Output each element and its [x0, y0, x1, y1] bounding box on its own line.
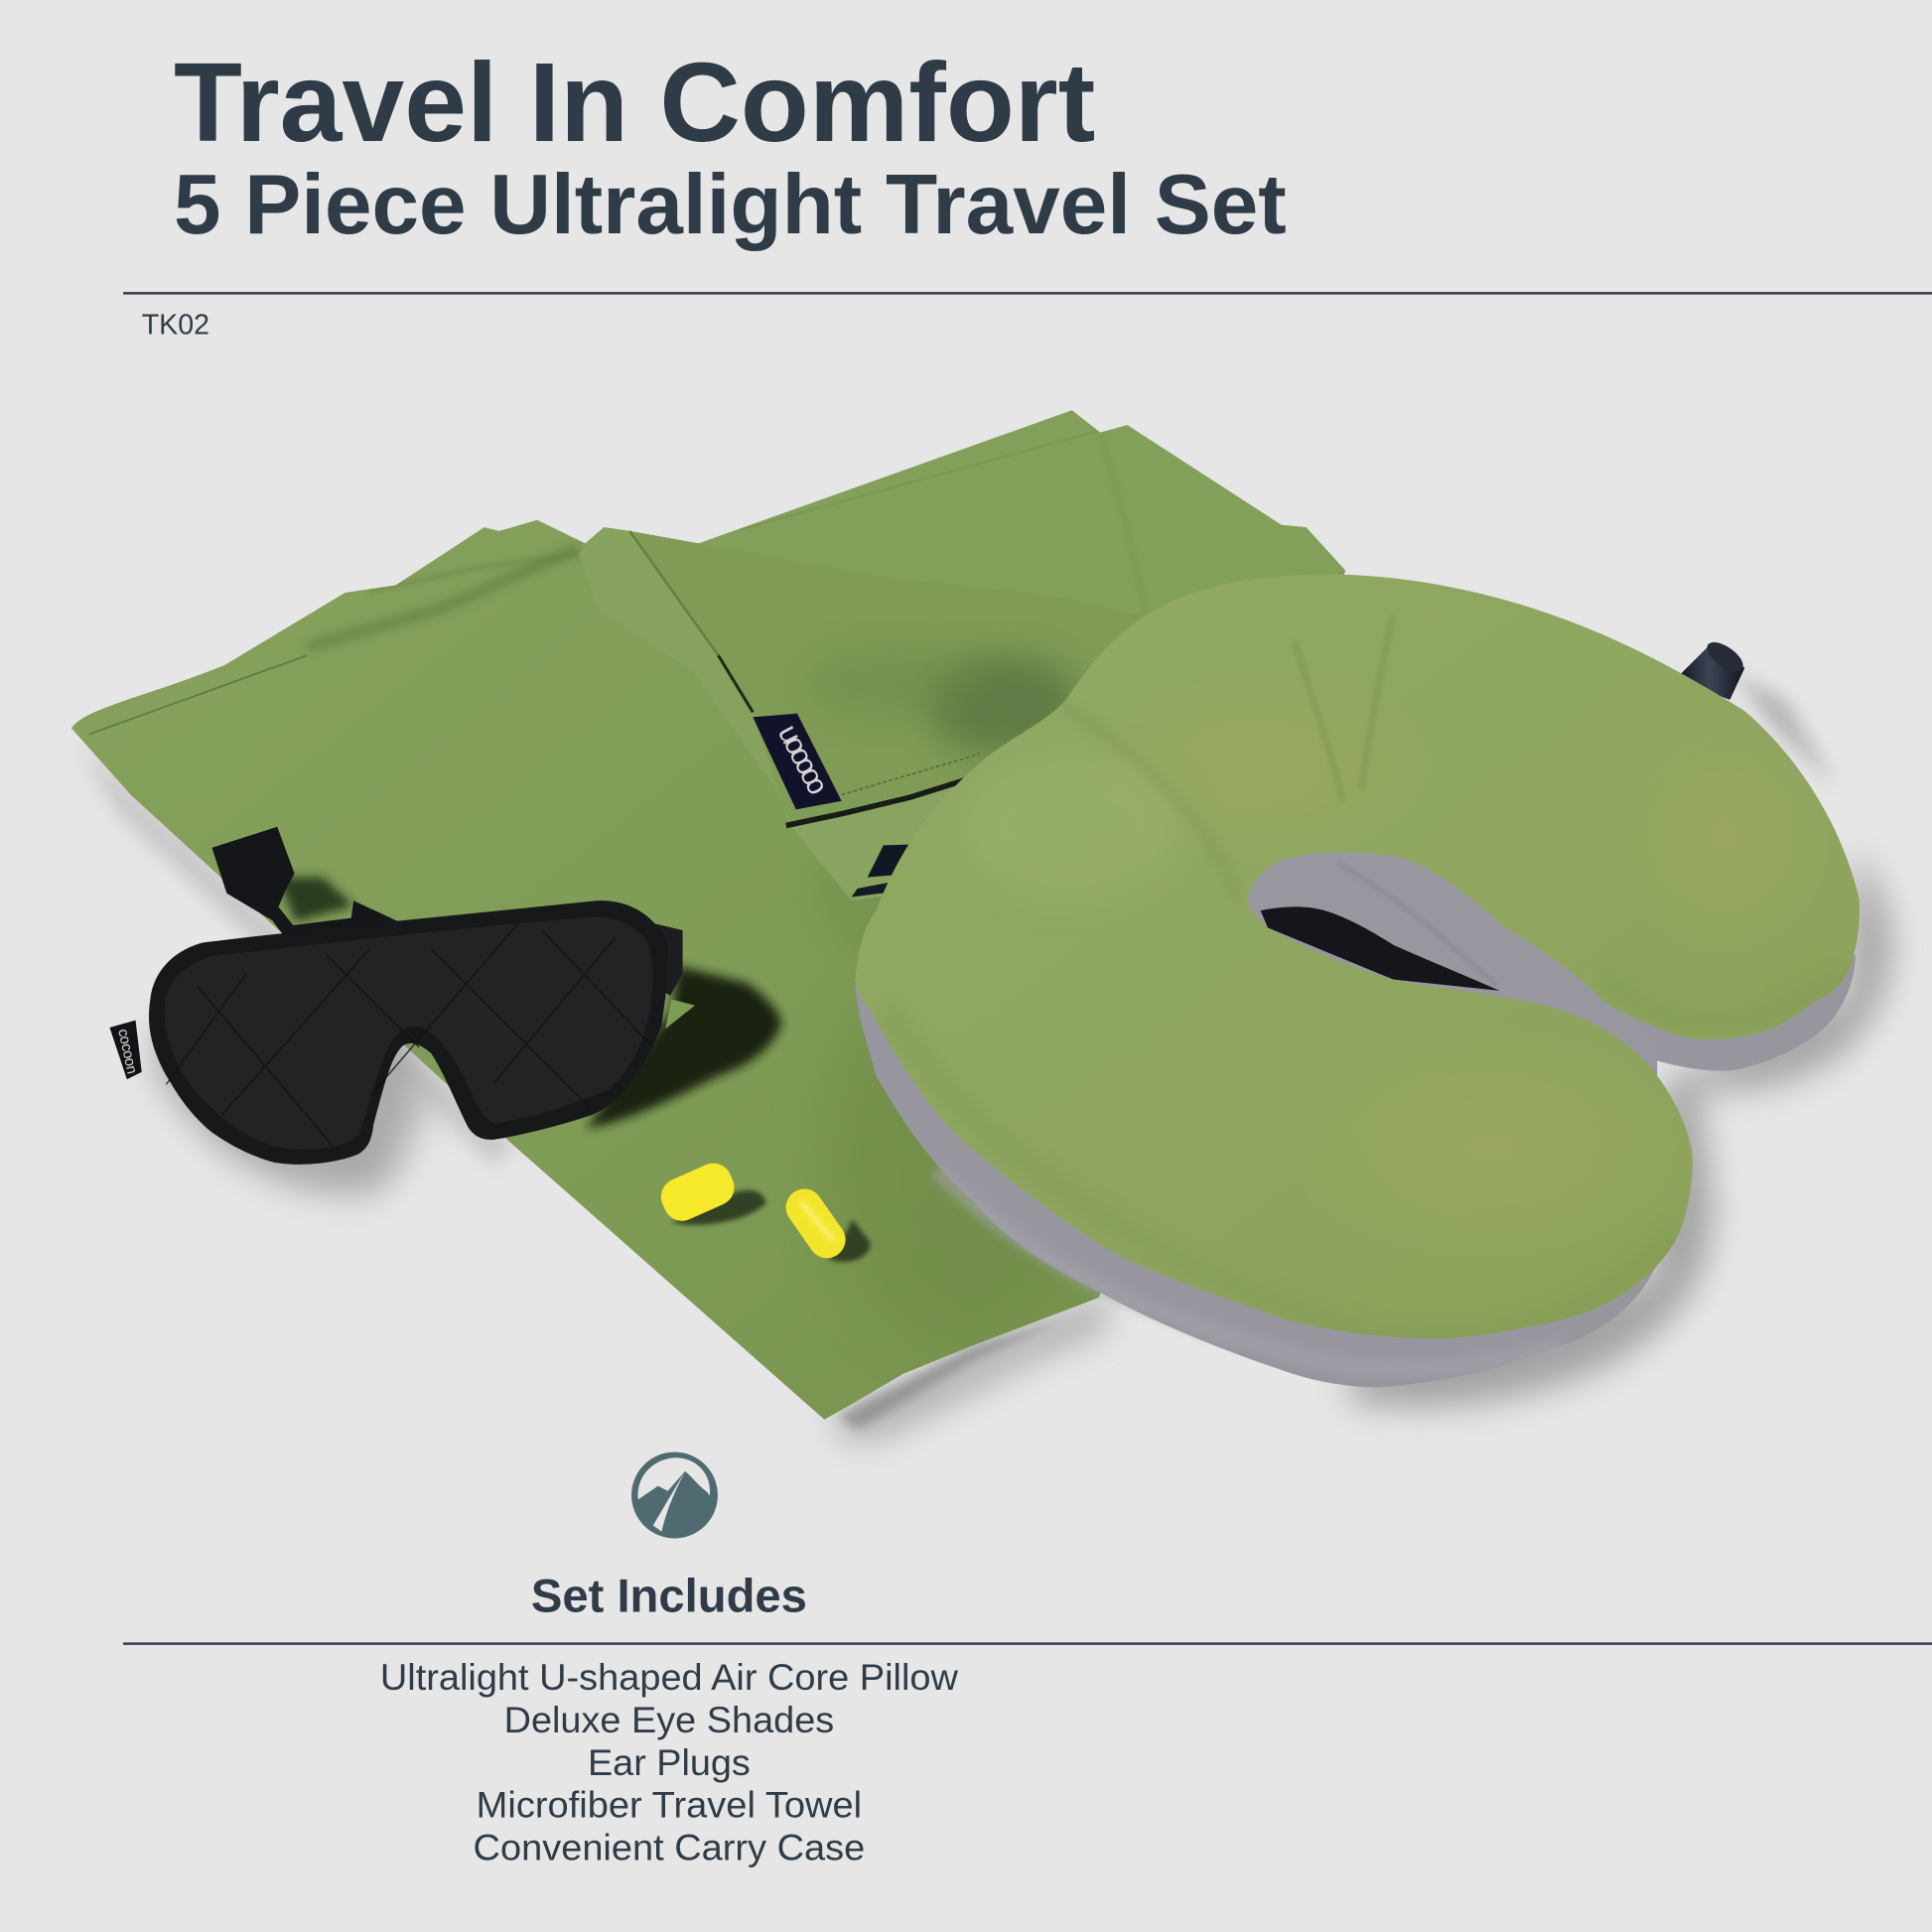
plug shadows	[671, 1190, 766, 1225]
plug right shadow	[828, 1220, 870, 1262]
list of included items: Ultralight U-shaped Air Core Pillow	[380, 1657, 959, 1698]
label text: cocoon	[768, 721, 832, 802]
towel label	[753, 714, 842, 809]
towel gap in strap shadow	[665, 1000, 695, 1029]
flap stitching	[842, 755, 980, 794]
list of included items: Microfiber Travel Towel	[477, 1785, 862, 1826]
back sheet	[699, 411, 1345, 570]
mask shadow on background	[154, 1023, 431, 1195]
green top surface	[855, 574, 1860, 1338]
plug right	[778, 1181, 853, 1266]
heading: set includes: Set Includes	[531, 1569, 807, 1621]
list of included items: Deluxe Eye Shades	[504, 1700, 834, 1740]
pillow shading	[1141, 620, 1749, 1177]
fold lower pocket	[852, 879, 910, 897]
travel towel	[71, 410, 1345, 1420]
air core pillow	[855, 574, 1860, 1387]
mask shadow on towel	[587, 966, 781, 1129]
fold dark pocket	[868, 844, 930, 878]
towel left edge shadow	[76, 740, 517, 1165]
eye shades	[109, 827, 683, 1165]
plug left	[655, 1158, 741, 1227]
inner grey fold	[1337, 863, 1497, 986]
towel shadow core	[838, 1320, 1059, 1430]
lower divider	[123, 1642, 1932, 1645]
product code: TK02	[142, 309, 209, 341]
left fold creases	[88, 655, 307, 735]
towel shading	[88, 410, 1345, 1343]
icon: mountain logo	[631, 1452, 718, 1538]
list of included items: Ear Plugs	[588, 1742, 751, 1783]
fold dark gap	[786, 777, 973, 826]
product photo: travel set	[71, 410, 1890, 1445]
list of included items: Convenient Carry Case	[474, 1827, 865, 1867]
top divider	[123, 292, 1932, 295]
inner grey wall	[1238, 844, 1657, 1084]
fold strip	[579, 527, 794, 830]
folded flap	[629, 531, 1146, 803]
strap	[211, 827, 409, 951]
ear plugs	[655, 1158, 870, 1266]
mask inner panel	[164, 916, 652, 1150]
pillow shadow	[1343, 850, 1890, 1407]
flap shadow	[928, 655, 1080, 755]
title: Travel In Comfort	[174, 40, 1095, 165]
subtitle: 5 Piece Ultralight Travel Set	[174, 157, 1287, 252]
valve	[1681, 636, 1747, 700]
valve shadow	[1731, 671, 1836, 788]
grey underside	[855, 899, 1856, 1387]
mask label	[109, 1021, 142, 1079]
mountain trail	[653, 1471, 685, 1532]
inner shadow gap	[1261, 906, 1499, 991]
grey rim highlight	[936, 1171, 1565, 1368]
mountain sky	[638, 1457, 710, 1499]
side strap	[652, 923, 683, 996]
mask body	[149, 900, 668, 1165]
mask label text: cocoon	[114, 1028, 139, 1075]
list of included items	[380, 1657, 959, 1867]
towel base layer	[71, 410, 1345, 1420]
strap shadow	[277, 878, 353, 921]
lower folds	[788, 777, 973, 900]
towel shadow	[828, 1294, 1109, 1445]
lower darker zone	[858, 1064, 1020, 1293]
quilting	[167, 924, 653, 1146]
